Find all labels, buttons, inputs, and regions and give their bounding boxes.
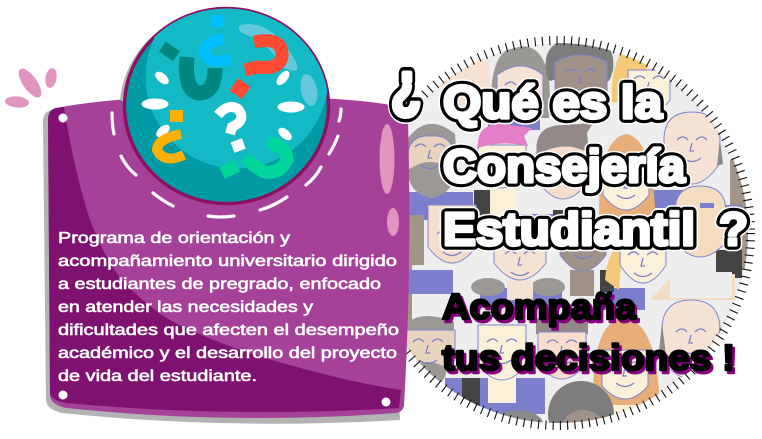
title line 2: Consejería: [443, 140, 685, 192]
description text: Programa de orientación y: [58, 230, 290, 247]
face: bearded man: [408, 124, 457, 198]
title line 3: Estudiantil: [443, 203, 695, 255]
title line 3: Estudiantil: [443, 203, 695, 255]
icon: red question mark: [230, 41, 282, 99]
panel rivets: [58, 114, 390, 406]
face: orange hair woman: [599, 134, 656, 217]
skin rim patches: [408, 60, 748, 404]
icon: green question mark: [219, 143, 287, 179]
ball glare: [239, 24, 298, 71]
face: eyes closed blonde: [605, 249, 666, 290]
title line 3: ?: [719, 203, 748, 255]
subtitle: [442, 286, 738, 381]
icon: blue inverted question mark: [204, 15, 231, 61]
ball shadow: [120, 18, 210, 118]
radial ticks: [366, 40, 750, 426]
panel dark fold: [48, 107, 401, 412]
face: dark lower: [560, 250, 606, 296]
title line 3: ?: [719, 203, 748, 255]
subtitle line 1: Acompaña: [444, 289, 640, 330]
face: gray spiky hair: [537, 123, 593, 199]
face: orange fringe woman: [593, 319, 660, 427]
bottom gray head: [499, 410, 543, 422]
face: bottom bearded man: [405, 316, 455, 388]
title line 2: Consejería: [443, 140, 685, 192]
title line 2: Consejería: [443, 140, 685, 192]
face: cream woman: [478, 325, 526, 403]
title line 1: Qué es la: [443, 76, 662, 128]
face: gray long hair: [491, 46, 550, 118]
description text: a estudiantes de pregrado, enfocado: [58, 276, 381, 293]
face: pink hair: [478, 124, 532, 217]
title: [391, 51, 748, 255]
face: man center bottom: [536, 318, 588, 379]
face: blonde orange hair: [612, 54, 670, 106]
crowd illustration circle: [406, 36, 755, 430]
shirts: [405, 112, 742, 414]
title line 1: ¿: [391, 51, 421, 120]
subtitle line 1: Acompaña: [442, 286, 637, 327]
title line 1: Qué es la: [443, 76, 662, 128]
ball base: [124, 8, 328, 204]
face: left lower: [410, 205, 476, 265]
description text: académico y el desarrollo del proyecto: [58, 345, 397, 362]
face: gray pigtails: [471, 245, 565, 300]
icon: orange inverted question mark: [157, 110, 184, 159]
title line 1: ¿: [391, 51, 421, 120]
title line 1: ¿: [391, 51, 421, 120]
white dashes around ball: [112, 109, 341, 217]
description text: dificultades que afecten el desempeño: [58, 322, 399, 339]
face: afro dark skin: [546, 43, 614, 92]
panel: purple description card: [43, 96, 409, 424]
panel body: [48, 96, 409, 418]
face: bald man: [661, 112, 723, 184]
description text: [58, 230, 399, 385]
ball light area: [146, 0, 328, 168]
decorative pink splash: [5, 65, 58, 109]
white pills: [142, 69, 304, 143]
ball of question marks: [120, 0, 328, 204]
description text: acompañamiento universitario dirigido: [58, 253, 397, 270]
title line 1: Qué es la: [443, 76, 662, 128]
description text: en atender las necesidades y: [58, 299, 313, 316]
panel highlights: [380, 124, 399, 236]
title line 1: [391, 51, 662, 128]
dark clothing patches: [462, 190, 742, 410]
panel shadow: [43, 98, 400, 424]
title line 3: Estudiantil: [443, 203, 695, 255]
subtitle line 2: tus decisiones !: [444, 340, 738, 381]
icon: white question mark: [218, 107, 246, 153]
title line 3: ?: [719, 203, 748, 255]
face: bottom bald man: [659, 300, 723, 379]
arm and shirt on right: [650, 272, 735, 300]
subtitle line 2: tus decisiones !: [442, 337, 735, 378]
bottom afro: [548, 381, 614, 423]
description text: de vida del estudiante.: [58, 368, 257, 385]
icon: teal question mark: [159, 41, 215, 93]
face: tan man: [675, 186, 726, 257]
